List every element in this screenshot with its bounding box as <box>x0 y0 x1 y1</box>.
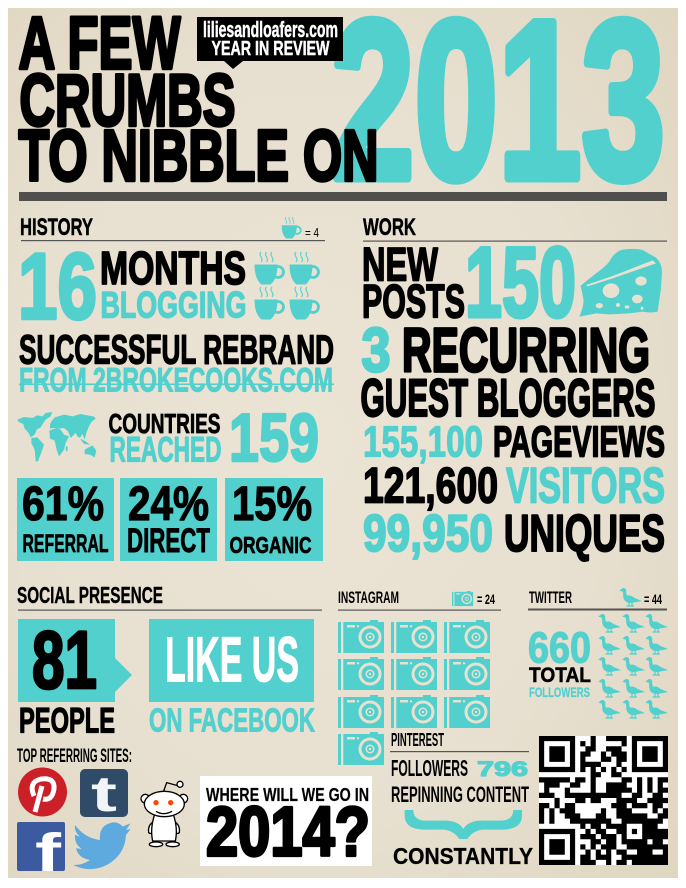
text: constantly: CONSTANTLY <box>393 843 533 869</box>
icon: curly brace <box>405 810 522 839</box>
stat: 155,100 pageviews: 155,100 <box>363 418 483 466</box>
stat: 99,950 uniques <box>363 505 665 563</box>
button: like us on facebook: ON FACEBOOK <box>149 702 315 738</box>
stat: new posts 150: NEW <box>362 238 438 290</box>
stat: followers 796: FOLLOWERS <box>391 755 468 781</box>
legend: cup equals 4 <box>282 217 319 240</box>
panel: direct 24%: DIRECT <box>127 522 210 560</box>
callout: 81 people: 81 <box>32 615 97 706</box>
icon: facebook <box>17 822 65 883</box>
stat: new posts 150: 150 <box>465 226 576 338</box>
heading: work: WORK <box>363 214 416 241</box>
callout: 81 people <box>18 615 132 740</box>
heading: instagram: INSTAGRAM <box>338 588 399 607</box>
stat: 660 total followers: TOTAL <box>529 664 591 687</box>
stat: 16 months blogging <box>18 234 246 338</box>
callout: year in review: liliesandloafers.com <box>203 17 338 42</box>
callout: year in review <box>197 17 343 69</box>
panel: organic 15%: ORGANIC <box>230 532 312 558</box>
icon: four coffee cups <box>254 252 318 320</box>
stat: followers 796: 796 <box>477 758 528 781</box>
icon: world map <box>17 412 96 461</box>
heading: twitter: TWITTER <box>529 588 572 607</box>
panel: organic 15% <box>225 478 323 561</box>
icon grid: ducks <box>599 614 667 718</box>
panel: history <box>17 214 334 561</box>
stat: 660 total followers: FOLLOWERS <box>529 684 590 700</box>
stat: 155,100 pageviews <box>363 418 665 466</box>
legend: duck equals 44: = 44 <box>644 591 662 607</box>
icon: facebook: f <box>35 823 62 883</box>
panel: organic 15%: 15% <box>232 478 312 531</box>
panel: pinterest <box>390 730 533 869</box>
icon: pinterest <box>18 768 67 816</box>
text: top referring sites: TOP REFERRING SITES: <box>17 746 132 767</box>
title: TO NIBBLE ON <box>18 116 378 196</box>
panel: referral 61%: REFERRAL <box>22 530 108 558</box>
text: repinning content: REPINNING CONTENT <box>391 782 529 807</box>
stat: countries reached 159: 159 <box>229 400 319 476</box>
title <box>18 2 378 196</box>
panel: where will we go in 2014 <box>200 776 372 870</box>
stat: 99,950 uniques: 99,950 <box>363 505 493 563</box>
callout: 81 people: PEOPLE <box>19 702 115 740</box>
legend: camera equals 24: = 24 <box>477 591 495 607</box>
title: A FEW <box>18 2 181 84</box>
stat: countries reached 159 <box>108 400 319 476</box>
panel: direct 24% <box>120 478 217 561</box>
stat: 3 recurring guest bloggers: 3 <box>362 316 390 386</box>
heading: social presence: SOCIAL PRESENCE <box>17 582 163 608</box>
heading: pinterest: PINTEREST <box>391 730 444 750</box>
stat: 16 months blogging: BLOGGING <box>100 284 246 326</box>
title: CRUMBS <box>20 60 236 142</box>
panel: twitter <box>528 588 667 718</box>
icon grid: cameras <box>338 620 490 765</box>
panel: where will we go in 2014: WHERE WILL WE GO IN <box>206 785 369 805</box>
panel: instagram <box>338 588 501 765</box>
stat: new posts 150 <box>362 226 576 338</box>
text: successful rebrand: SUCCESSFUL REBRAND <box>19 326 334 372</box>
panel: referral 61% <box>17 478 114 561</box>
icon: tumblr: t <box>91 766 118 822</box>
stat: 660 total followers <box>528 624 591 700</box>
panel: social presence <box>17 582 372 883</box>
stat: 3 recurring guest bloggers <box>360 316 656 428</box>
stat: 660 total followers: 660 <box>528 624 591 672</box>
legend: camera equals 24 <box>452 591 495 607</box>
button: like us on facebook <box>149 619 315 738</box>
icon: tumblr <box>80 766 128 822</box>
legend: cup equals 4: = 4 <box>305 225 319 240</box>
stat: new posts 150: POSTS <box>362 274 465 328</box>
text: from 2brokecooks.com struck through: FROM 2BROKECOOKS.COM <box>19 362 333 400</box>
panel: direct 24%: 24% <box>128 478 209 531</box>
callout: year in review: YEAR IN REVIEW <box>212 38 330 60</box>
panel: where will we go in 2014: 2014? <box>206 792 370 870</box>
icon: cheese <box>579 249 662 317</box>
stat: 16 months blogging: 16 <box>18 234 97 338</box>
icon: twitter bird <box>73 822 131 869</box>
stat: 121,600 visitors: 121,600 <box>363 458 498 514</box>
button: like us on facebook: LIKE US <box>165 624 299 696</box>
panel: work <box>360 214 667 563</box>
QR code <box>539 736 668 865</box>
stat: countries reached 159: COUNTRIES <box>108 408 220 439</box>
icon: reddit alien <box>141 781 188 847</box>
heading: history: HISTORY <box>20 214 93 241</box>
stat: 16 months blogging: MONTHS <box>100 242 246 294</box>
panel: referral 61%: 61% <box>22 478 104 531</box>
stat: 121,600 visitors <box>363 458 665 514</box>
stat: countries reached 159: REACHED <box>110 430 222 470</box>
